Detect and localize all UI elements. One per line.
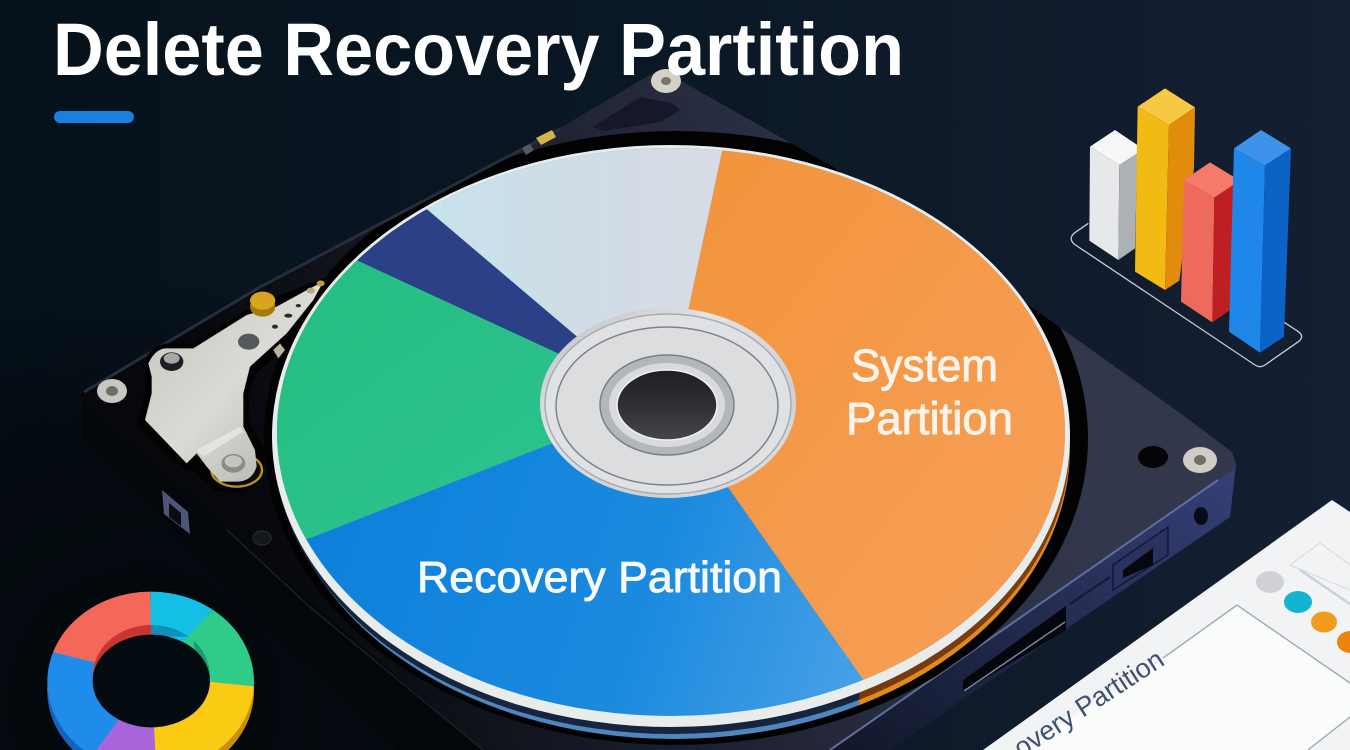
drive side wall: [830, 452, 1236, 750]
bar: blue: [1229, 130, 1291, 353]
slice: pale: [427, 148, 722, 336]
hub outer ring: [540, 308, 796, 498]
button: lower left: [253, 531, 271, 545]
slot: top: [593, 97, 680, 131]
segment: cyan: [150, 592, 213, 642]
donut inner wall: [92, 625, 210, 681]
bar: white: [1089, 130, 1137, 260]
hole: right: [1138, 446, 1168, 468]
slice: recovery partition blue: [277, 148, 1065, 716]
dot: deep orange: [1337, 631, 1350, 653]
label: system partition: System: [851, 340, 998, 391]
side slot: [963, 577, 1110, 692]
hub: [540, 308, 796, 498]
dot: cyan: [1284, 591, 1312, 613]
label: system partition: [846, 340, 1013, 444]
gold ring: [211, 453, 262, 487]
title underline: [54, 111, 134, 123]
donut side band: [47, 601, 254, 750]
slice: navy: [357, 209, 577, 354]
screw: arm bottom: [221, 454, 245, 473]
top of drive detail: [522, 69, 681, 155]
drive top-left lit edge: [84, 129, 560, 392]
port connector: [1113, 527, 1168, 590]
chip: left side: [162, 490, 190, 534]
drive left side wall: [82, 400, 483, 750]
screw: top: [651, 69, 681, 93]
sheet background: [980, 495, 1350, 750]
label: recovery partition: Recovery Partition: [417, 553, 782, 602]
drive top face: [82, 70, 1236, 750]
slice: system partition orange: [688, 150, 1065, 680]
title: Delete Recovery Partition: [53, 8, 904, 91]
actuator plate: [145, 282, 323, 482]
mini panel: [1290, 543, 1350, 604]
donut chart icon: [47, 592, 254, 750]
actuator arm: [137, 277, 327, 493]
label: system partition: Partition: [846, 393, 1013, 444]
segment: blue: [47, 652, 119, 750]
disc shadow band: [274, 152, 1070, 734]
donut hole: [93, 635, 210, 727]
screw: arm top: [160, 352, 183, 371]
chart base outline: [1071, 223, 1302, 367]
disc lower edge: [278, 157, 1070, 739]
segment: green: [183, 610, 254, 686]
arm tip gold: [307, 280, 325, 294]
slice: green: [277, 260, 558, 540]
donut top segments: [47, 592, 254, 750]
sheet inner area: [1020, 607, 1350, 750]
hub plate: [545, 314, 791, 494]
arm tip details: [272, 304, 301, 358]
hard drive: [82, 69, 1236, 750]
document sheet: [980, 495, 1350, 750]
plate fold: [197, 427, 243, 457]
drive lower-left edge line: [227, 530, 483, 750]
disc well: [264, 131, 1088, 745]
sheet inner frame: [1163, 605, 1350, 683]
dot: gray: [1256, 571, 1284, 593]
port hole: [1194, 507, 1208, 525]
actuator recess: [137, 277, 327, 493]
segment: yellow: [154, 682, 254, 750]
bar: yellow: [1135, 88, 1195, 290]
screw: right corner: [1183, 447, 1217, 473]
spindle hole: [617, 370, 717, 440]
spindle ring: [600, 355, 734, 455]
segment: purple: [96, 720, 156, 750]
gold pivot cap: [250, 292, 275, 317]
connector: gold: [522, 130, 556, 155]
bar: red: [1181, 162, 1233, 322]
screw: arm middle: [238, 334, 259, 350]
hub groove: [556, 327, 778, 485]
3D bar chart icon: [1071, 88, 1302, 367]
pie slices: [277, 148, 1065, 716]
disc rim: [272, 145, 1070, 727]
drive face edge highlight: [830, 480, 1218, 750]
dot: orange: [1311, 612, 1337, 632]
disc: [272, 145, 1070, 739]
screw: left corner: [97, 379, 127, 403]
segment: red: [53, 592, 151, 662]
